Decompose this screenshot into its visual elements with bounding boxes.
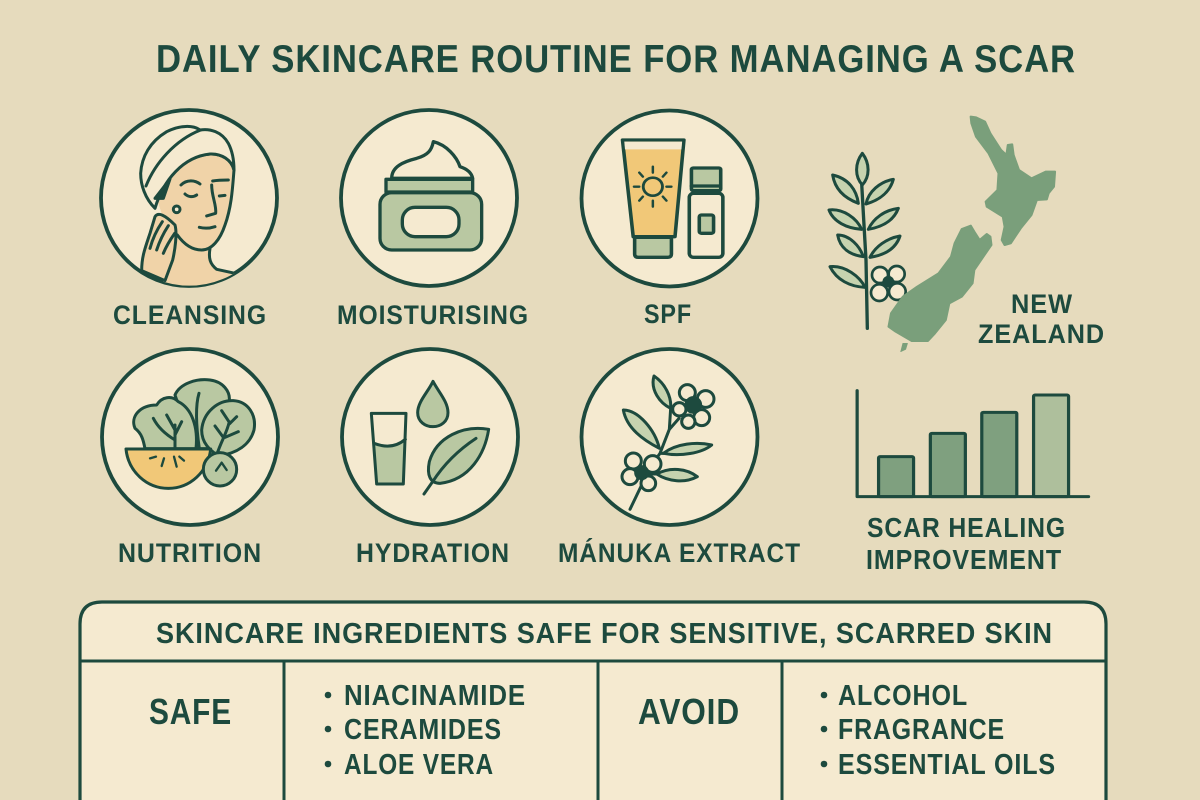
- label: manuka extract: MÁNUKA EXTRACT: [558, 537, 801, 568]
- list: safe ingredients: [325, 680, 526, 781]
- panel: hydration: [342, 349, 518, 568]
- label: moisturising: MOISTURISING: [337, 300, 529, 330]
- label: New Zealand: ZEALAND: [978, 319, 1105, 349]
- panel: moisturising: [337, 110, 529, 330]
- panel: SPF: [582, 110, 758, 329]
- panel: ingredients table: [80, 602, 1106, 800]
- table grid: [80, 661, 1106, 800]
- table heading: SKINCARE INGREDIENTS SAFE FOR SENSITIVE, SCARRED SKIN: [156, 618, 1053, 650]
- icon: cream jar: [341, 110, 517, 286]
- icon: sunscreen tube and bottle: [582, 110, 758, 286]
- bar chart: [857, 391, 1089, 497]
- table frame: [80, 602, 1106, 800]
- label: scar healing improvement: SCAR HEALING: [867, 512, 1066, 543]
- list: safe ingredients: ALOE VERA: [344, 749, 494, 781]
- panel: cleansing: [101, 110, 277, 330]
- panel: New Zealand: [829, 117, 1105, 352]
- icon: woman applying cleanser: [101, 110, 277, 297]
- icon: manuka sprig: [829, 153, 906, 328]
- label: hydration: HYDRATION: [356, 538, 510, 568]
- list: ingredients to avoid: ALCOHOL: [838, 680, 968, 712]
- column: safe: SAFE: [149, 691, 232, 732]
- label: New Zealand: NEW: [1011, 289, 1073, 319]
- panel: nutrition: [102, 349, 278, 568]
- panel: scar healing improvement: [857, 391, 1089, 575]
- list: safe ingredients: CERAMIDES: [344, 714, 502, 746]
- icon: glass, droplet and leaf: [342, 349, 518, 525]
- label: SPF: SPF: [644, 299, 692, 329]
- map of New Zealand: [889, 117, 1055, 352]
- list: safe ingredients: NIACINAMIDE: [344, 680, 526, 712]
- icon: salad bowl: [102, 349, 278, 525]
- label: cleansing: CLEANSING: [113, 300, 267, 330]
- label: New Zealand: [978, 289, 1105, 349]
- list: ingredients to avoid: ESSENTIAL OILS: [838, 749, 1056, 781]
- icon: manuka flower branch: [582, 349, 758, 525]
- list: ingredients to avoid: [821, 680, 1056, 781]
- list: ingredients to avoid: FRAGRANCE: [838, 714, 1005, 746]
- label: scar healing improvement: IMPROVEMENT: [866, 544, 1062, 575]
- label: scar healing improvement: [866, 512, 1066, 575]
- panel: manuka extract: [558, 349, 801, 568]
- label: nutrition: NUTRITION: [118, 538, 262, 568]
- title: DAILY SKINCARE ROUTINE FOR MANAGING A SCAR: [156, 38, 1076, 81]
- column: avoid: AVOID: [638, 691, 740, 732]
